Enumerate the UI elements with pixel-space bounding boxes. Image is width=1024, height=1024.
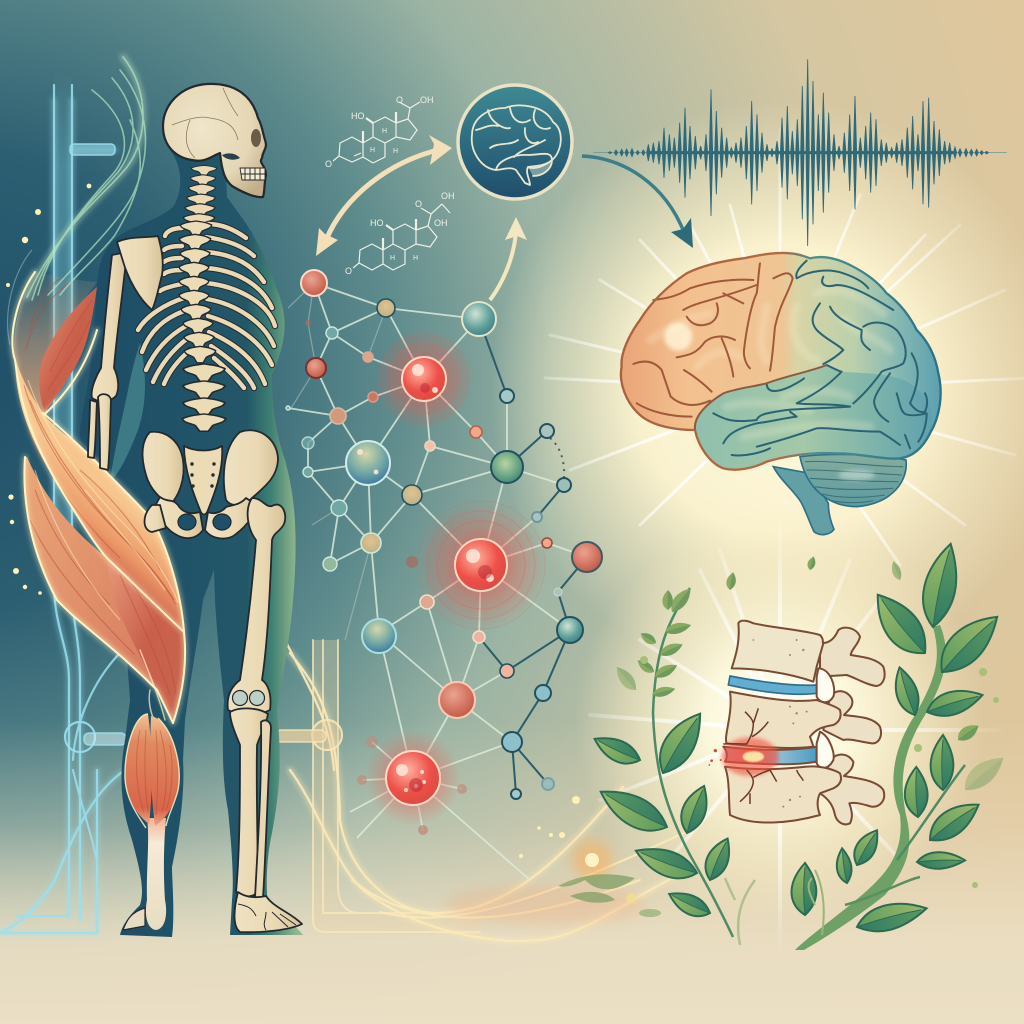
right foot — [234, 892, 302, 932]
chemical structure: lower steroid: HO — [370, 218, 384, 228]
right plant — [792, 540, 1010, 950]
calf tendon — [146, 818, 166, 930]
glow behind vertebrae — [575, 515, 985, 925]
middle vertebral body — [726, 692, 841, 748]
calf left head — [125, 714, 152, 824]
teeth — [240, 168, 265, 180]
large brain — [621, 253, 941, 535]
chemical structure: lower steroid: OH — [434, 218, 448, 228]
cerebellum — [800, 454, 906, 507]
glowing muscle edges — [12, 272, 185, 723]
human body silhouette — [80, 150, 303, 937]
chemical structure: upper steroid: OH — [420, 95, 434, 105]
sacral holes — [190, 462, 216, 488]
green and teal glowing ribbon — [27, 57, 145, 300]
lower process — [820, 755, 884, 824]
red nodes — [301, 270, 602, 805]
left plant large leaves — [590, 705, 736, 922]
injured disc — [723, 747, 817, 764]
cerebrum main — [621, 253, 941, 470]
right ribs — [206, 224, 275, 388]
side branch — [897, 765, 965, 860]
inflamed red node halos — [365, 329, 546, 826]
right femur — [228, 498, 285, 714]
faded upper sheet — [14, 272, 97, 414]
arrow: double arrow between steroid and network — [316, 135, 452, 256]
chemical structure: upper steroid: HO — [351, 111, 364, 121]
teal small nodes — [286, 327, 347, 571]
sacrum — [184, 446, 222, 514]
tan and peach small nodes — [305, 299, 552, 678]
frame lines: blue scaffold — [0, 72, 126, 933]
muscle ribbons — [12, 272, 186, 930]
sound waveform — [593, 59, 1007, 246]
right plant leaves — [792, 540, 1008, 938]
arrow: brain icon to large brain — [582, 156, 693, 248]
calf right head — [150, 716, 179, 826]
sparkle dots — [6, 184, 636, 903]
network edges: pale links — [288, 283, 587, 880]
left arm bones — [88, 252, 127, 470]
upper vertebral body — [732, 621, 823, 682]
chemical structure: upper steroid: H — [382, 128, 387, 135]
brain line drawing — [472, 105, 561, 185]
orange gyri folds — [633, 263, 793, 417]
pelvic foramina — [178, 514, 196, 530]
left plant small leaves — [612, 584, 695, 699]
middle process — [823, 691, 881, 743]
bright glow behind large brain — [490, 100, 1024, 680]
bone pitting — [752, 639, 808, 808]
brain stem — [773, 467, 834, 535]
main vine — [795, 625, 946, 950]
red specks — [708, 749, 722, 766]
skull details — [172, 88, 238, 158]
chemical structure: lower steroid: H — [413, 255, 418, 262]
left plant stem — [653, 588, 733, 937]
thoracic and lumbar spine — [179, 221, 226, 431]
chemical structure: upper steroid — [325, 95, 434, 169]
lower vertebral body — [725, 766, 841, 823]
main long muscle — [15, 357, 184, 632]
hamstring strand — [107, 558, 186, 723]
upper disc — [728, 676, 817, 694]
cream lower band — [0, 720, 1024, 1024]
pelvis right ilium — [224, 430, 278, 505]
right pelvic foramen — [213, 514, 231, 530]
upper process — [820, 628, 885, 686]
skull — [163, 84, 266, 197]
dotted network tail — [550, 438, 564, 478]
lower foramen — [817, 732, 834, 768]
chemical structure: upper steroid: H — [393, 148, 398, 155]
orange light spark — [572, 840, 612, 880]
small background sprout — [809, 870, 824, 935]
chemical structure: lower steroid: OH — [441, 191, 454, 201]
red node texture — [409, 383, 492, 792]
upper red strand — [39, 287, 97, 412]
gyri light folds — [650, 290, 890, 437]
fibula — [255, 720, 271, 898]
network edges: dark links — [478, 319, 587, 794]
network edges: faint links — [288, 283, 386, 640]
lumbar vertebrae with fracture — [708, 621, 885, 824]
drifting leaves and specks — [640, 555, 999, 888]
chemical structure: lower steroid — [345, 191, 454, 276]
lower left sprout — [725, 878, 755, 945]
arrow: network up to brain icon — [490, 217, 527, 300]
nasal and cheek hollow — [222, 153, 240, 160]
foot bone detail — [238, 904, 296, 930]
inflammation glow on fracture — [722, 737, 778, 776]
chemical structure: upper steroid: O — [325, 159, 332, 169]
faded drifting leaves by the spark — [558, 874, 661, 917]
muscle fibres — [24, 278, 176, 695]
left foot — [123, 908, 145, 930]
tibia — [230, 708, 268, 896]
chemical structure: upper steroid: O — [396, 95, 403, 105]
pelvis left ilium — [143, 432, 184, 505]
calf fibres — [137, 730, 172, 815]
spine neck vertebrae — [183, 165, 217, 227]
chemical structure: lower steroid: H — [390, 255, 395, 262]
skeleton — [88, 84, 302, 932]
chemical structure: lower steroid: O — [415, 199, 422, 209]
knee condyles — [232, 690, 264, 706]
orange haze along lower ribbons — [445, 885, 645, 925]
calf outline — [125, 714, 179, 828]
chemical structure: upper steroid: H — [370, 147, 375, 154]
temporal lobe front edge — [695, 365, 827, 430]
lower branch — [845, 877, 920, 905]
eye socket — [251, 129, 261, 147]
brain rim outline — [621, 253, 941, 470]
teal gyri folds — [713, 261, 927, 455]
small brain icon badge — [458, 85, 572, 199]
pubic bones — [154, 497, 203, 538]
cerebellum highlight — [838, 470, 875, 480]
faded leaf — [958, 749, 1010, 797]
white light spark core — [585, 853, 599, 867]
light rays around vertebrae — [590, 520, 1000, 950]
brain highlight — [664, 323, 692, 351]
gap between arm and torso — [110, 343, 145, 482]
cerebellum folds — [805, 461, 903, 503]
faded leaf nodes — [357, 736, 467, 835]
cracks — [723, 708, 803, 804]
node highlights — [357, 364, 494, 792]
second lower strand — [24, 457, 173, 723]
network nodes — [286, 270, 602, 835]
frame lines: cream scaffold — [276, 640, 690, 941]
upper foramen — [817, 668, 834, 702]
bright fracture centre — [743, 751, 764, 762]
muscle fibre highlights — [28, 380, 178, 620]
left hip stub — [144, 505, 166, 532]
light rays around brain — [545, 130, 1024, 565]
thin arc by the ribbon — [8, 250, 32, 345]
left plant — [590, 584, 736, 937]
left ribs — [138, 228, 190, 384]
chemical structure: lower steroid: O — [345, 266, 352, 276]
shoulder blade — [117, 236, 163, 310]
temporal lobe — [695, 365, 933, 470]
teal nodes — [346, 302, 583, 752]
hollow nodes — [500, 389, 571, 799]
